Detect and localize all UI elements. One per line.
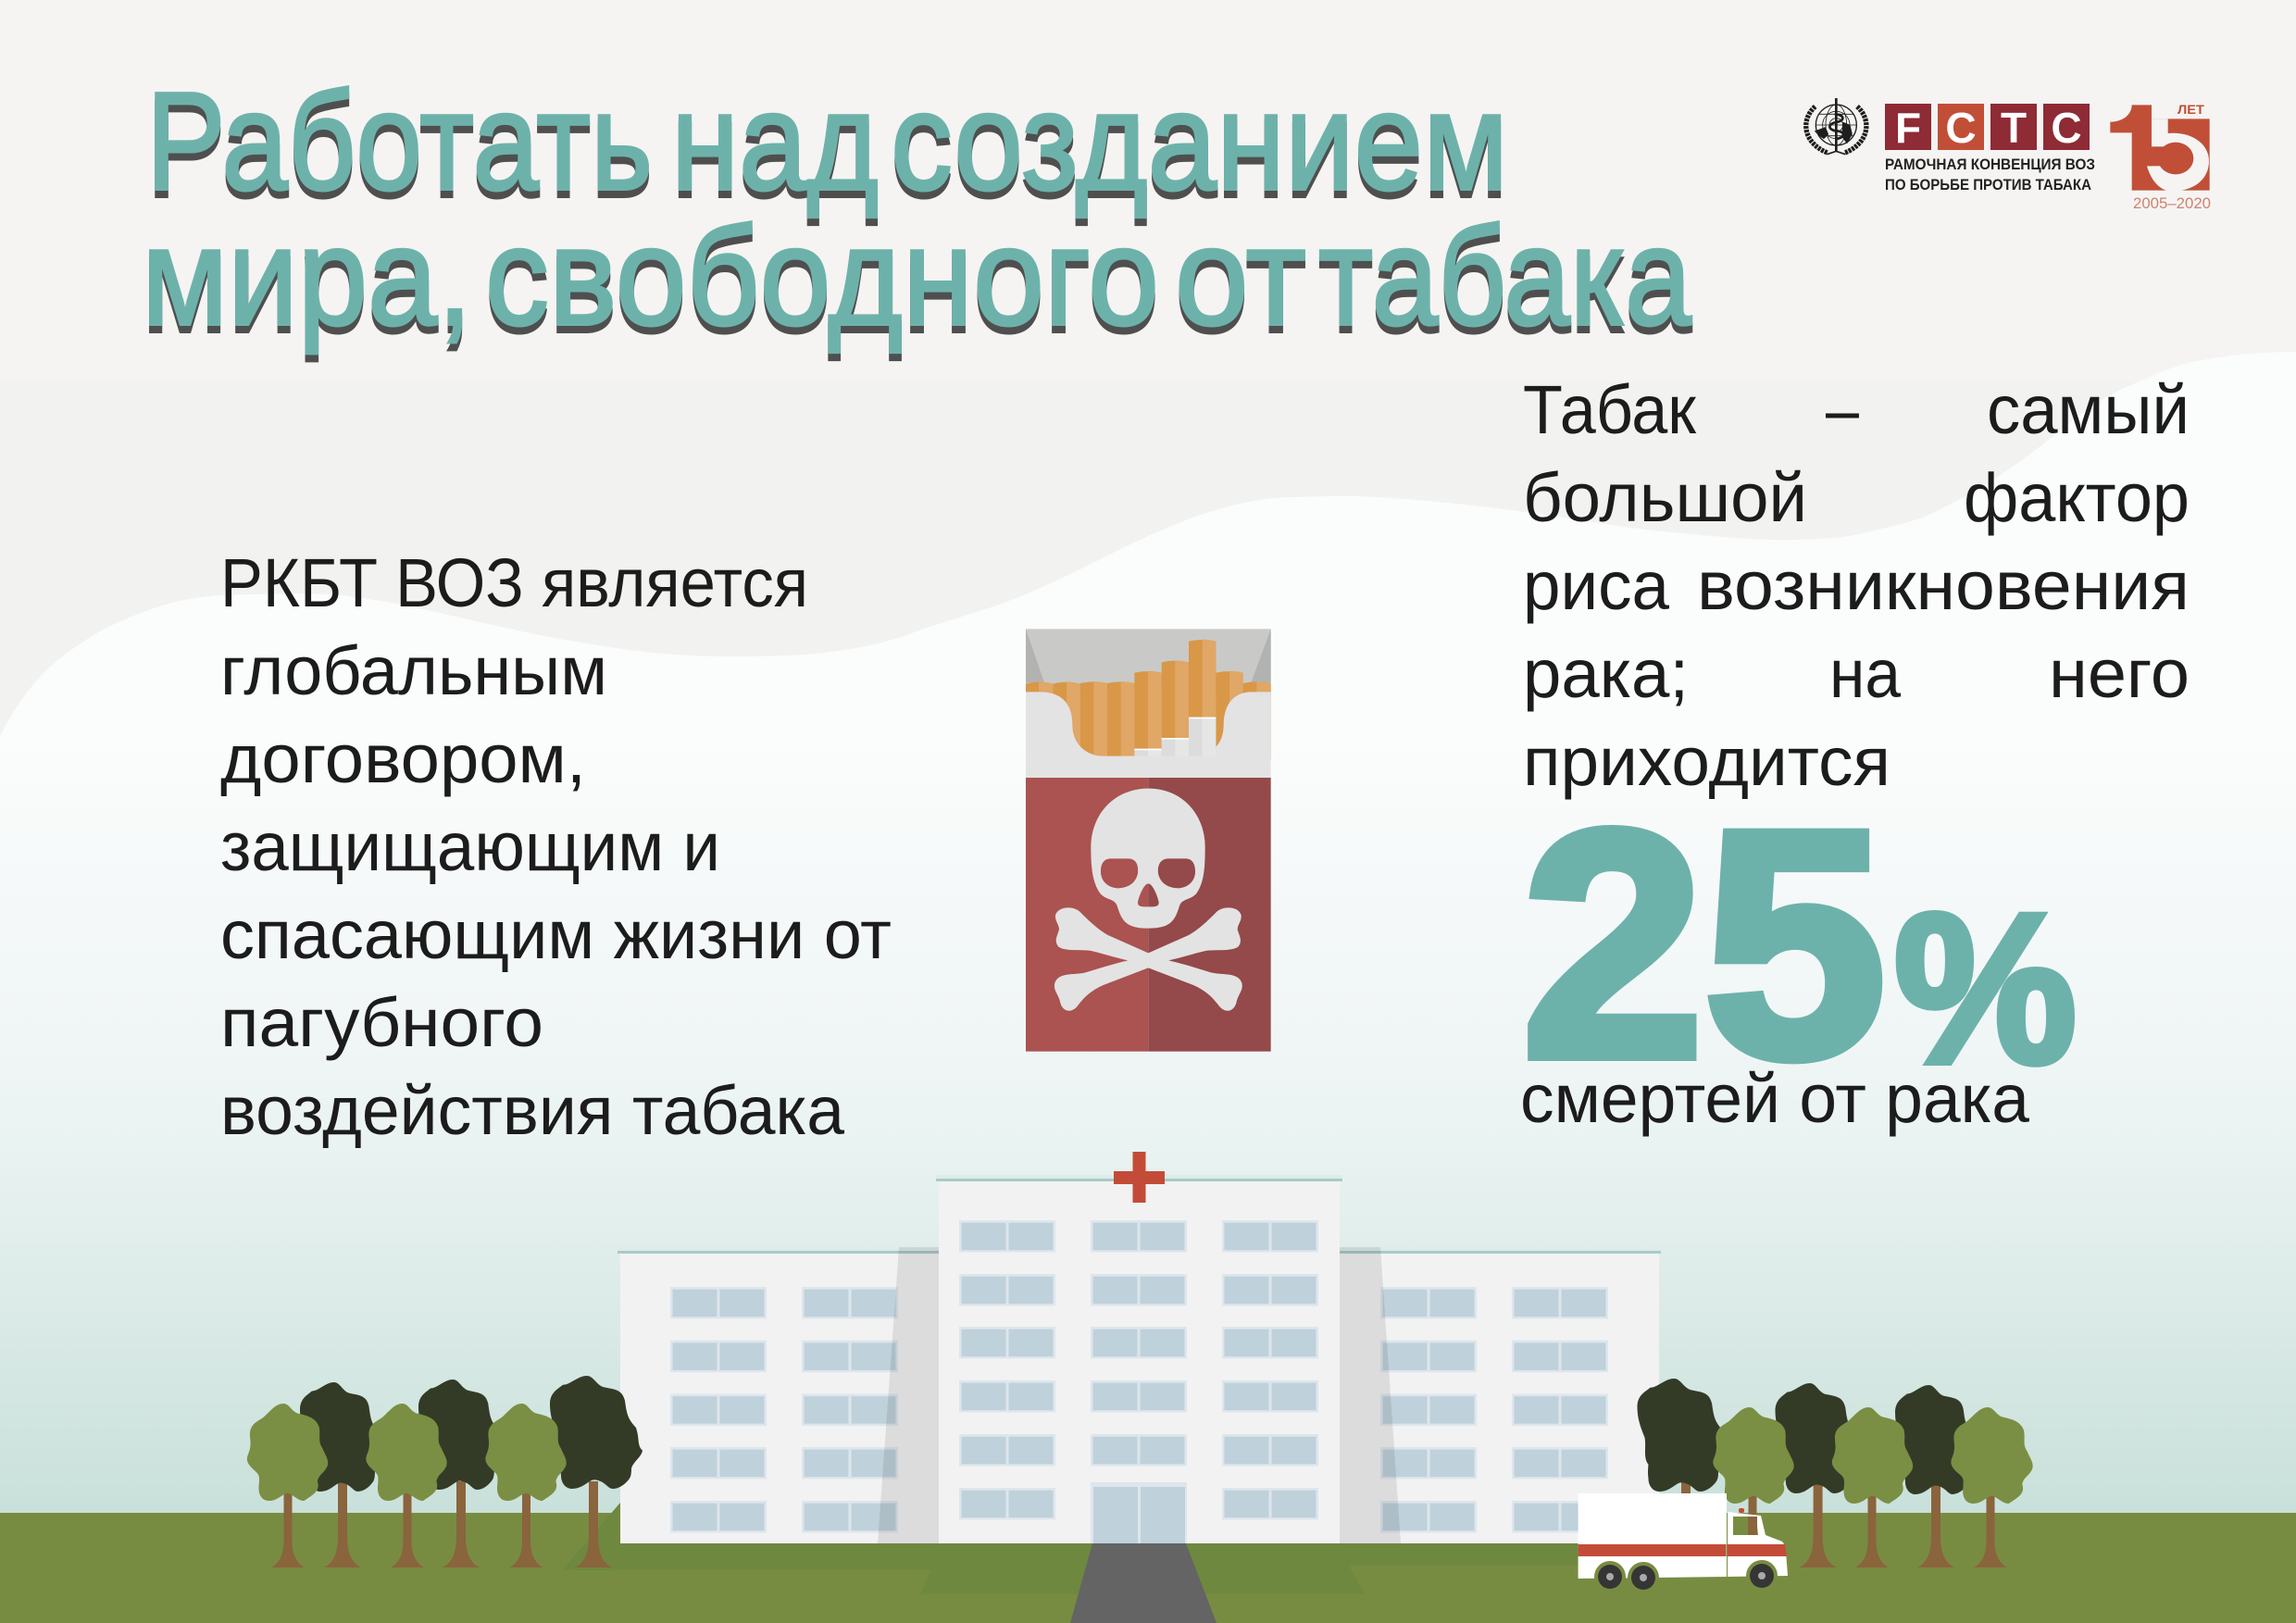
- intro text: самый: [1987, 371, 2190, 448]
- left wing: [618, 1248, 944, 1543]
- intro text: возникновения: [1697, 547, 2190, 624]
- central block: [936, 1175, 1342, 1543]
- FCTC squares: C: [1945, 104, 1977, 152]
- title face: от: [1175, 198, 1306, 354]
- title shadow: свободного: [485, 206, 1159, 361]
- title shadow: [142, 70, 1691, 361]
- intro text: него: [2049, 635, 2190, 712]
- dark trees: [300, 1376, 643, 1567]
- title face: табака: [1318, 198, 1691, 354]
- big number: 25: 25: [1522, 764, 1886, 1124]
- pack front top: [1026, 692, 1271, 778]
- wing shadows: [878, 1247, 1401, 1543]
- intro text: приходится: [1523, 723, 1890, 800]
- wheels: [1594, 1560, 1778, 1593]
- title shadow: созданием: [891, 70, 1508, 226]
- title: [142, 63, 1691, 361]
- icon: crossbones: [1054, 907, 1242, 1011]
- intro text: большой: [1523, 459, 1807, 536]
- text block: left: воздействия табака: [220, 1072, 845, 1149]
- title shadow: над: [671, 70, 879, 226]
- title face: свободного: [485, 198, 1159, 354]
- percent sign: %: [1894, 869, 2077, 1107]
- text block: left: спасающим жизни от: [220, 896, 892, 973]
- caption: смертей от рака: [1520, 1060, 2030, 1137]
- title shadow: табака: [1318, 206, 1691, 361]
- 15 years label: ЛЕТ: [2177, 102, 2204, 117]
- FCTC squares: F: [1895, 104, 1921, 152]
- trees: left group: [247, 1376, 643, 1567]
- FCTC caption: РАМОЧНАЯ КОНВЕНЦИЯ ВОЗ: [1885, 156, 2095, 173]
- FCTC squares: T: [2001, 104, 2027, 152]
- window tree trunk: [1748, 1517, 1757, 1535]
- icon: skull: [1091, 789, 1205, 929]
- title shadow: мира,: [142, 206, 472, 361]
- intro text: –: [1826, 371, 1860, 448]
- ambulance cab: [1728, 1512, 1788, 1577]
- text block: left: РКБТ ВОЗ является: [220, 544, 808, 621]
- text block: left: пагубного: [220, 984, 543, 1061]
- text block: left: договором,: [220, 720, 586, 797]
- text block: left: защищающим и: [220, 808, 720, 885]
- title shadow: от: [1175, 206, 1306, 361]
- title face: созданием: [891, 63, 1508, 218]
- FCTC caption: ПО БОРЬБЕ ПРОТИВ ТАБАКА: [1885, 176, 2091, 194]
- entrance door: [1091, 1482, 1187, 1543]
- pack lid interior: [1026, 629, 1271, 692]
- 15 years mark: [2110, 105, 2210, 192]
- title face: [142, 63, 1691, 354]
- title shadow: Работать: [146, 70, 653, 226]
- ground: [0, 1503, 2296, 1623]
- intro text: рака;: [1523, 635, 1689, 712]
- title face: над: [671, 63, 879, 218]
- cigarettes: [1026, 640, 1271, 761]
- ambulance: [1578, 1493, 1788, 1593]
- FCTC caption: [1885, 156, 2095, 194]
- logo group: [1806, 98, 2211, 212]
- cab window: [1733, 1517, 1758, 1535]
- hospital building: [618, 1152, 1661, 1543]
- anniversary dates: 2005–2020: [2133, 194, 2211, 212]
- trees: right group: [1637, 1379, 2033, 1567]
- light trees: [247, 1404, 567, 1567]
- intro text: фактор: [1964, 459, 2190, 536]
- road: [1070, 1543, 1217, 1623]
- title face: мира,: [142, 198, 472, 354]
- dark trees: [1637, 1379, 1979, 1567]
- right wing: [1333, 1248, 1661, 1543]
- light trees: [1713, 1407, 2033, 1567]
- FCTC squares: [1885, 104, 2090, 152]
- icon: WHO emblem: [1806, 98, 1866, 155]
- siren: [1739, 1508, 1744, 1513]
- pack label: [1026, 778, 1271, 1052]
- intro text: риса: [1523, 547, 1670, 624]
- intro text: Табак: [1523, 371, 1697, 448]
- red stripe: [1578, 1544, 1787, 1556]
- intro text: [1523, 371, 2190, 800]
- FCTC squares: C: [2051, 104, 2082, 152]
- text block: left: глобальным: [220, 632, 607, 709]
- text block: left: [220, 544, 892, 1149]
- text block: right: [1520, 371, 2190, 1137]
- intro text: на: [1829, 635, 1902, 712]
- title face: Работать: [146, 63, 653, 218]
- ambulance box: [1578, 1493, 1727, 1579]
- icon: cigarette pack: [1026, 629, 1271, 1052]
- icon: red cross: [1114, 1152, 1165, 1203]
